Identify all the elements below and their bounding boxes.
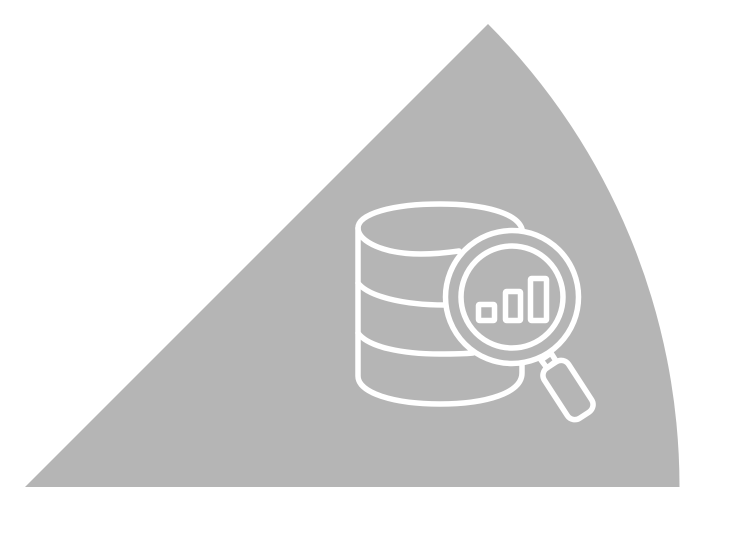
panel: grey 45-degree sector	[25, 24, 680, 487]
icon: bar chart in lens	[478, 278, 546, 320]
icon: database cylinder	[358, 204, 522, 404]
icon: magnifying glass handle	[540, 353, 596, 423]
icon: magnifying glass lens	[446, 230, 578, 364]
icon: database with magnifying glass	[358, 204, 596, 423]
